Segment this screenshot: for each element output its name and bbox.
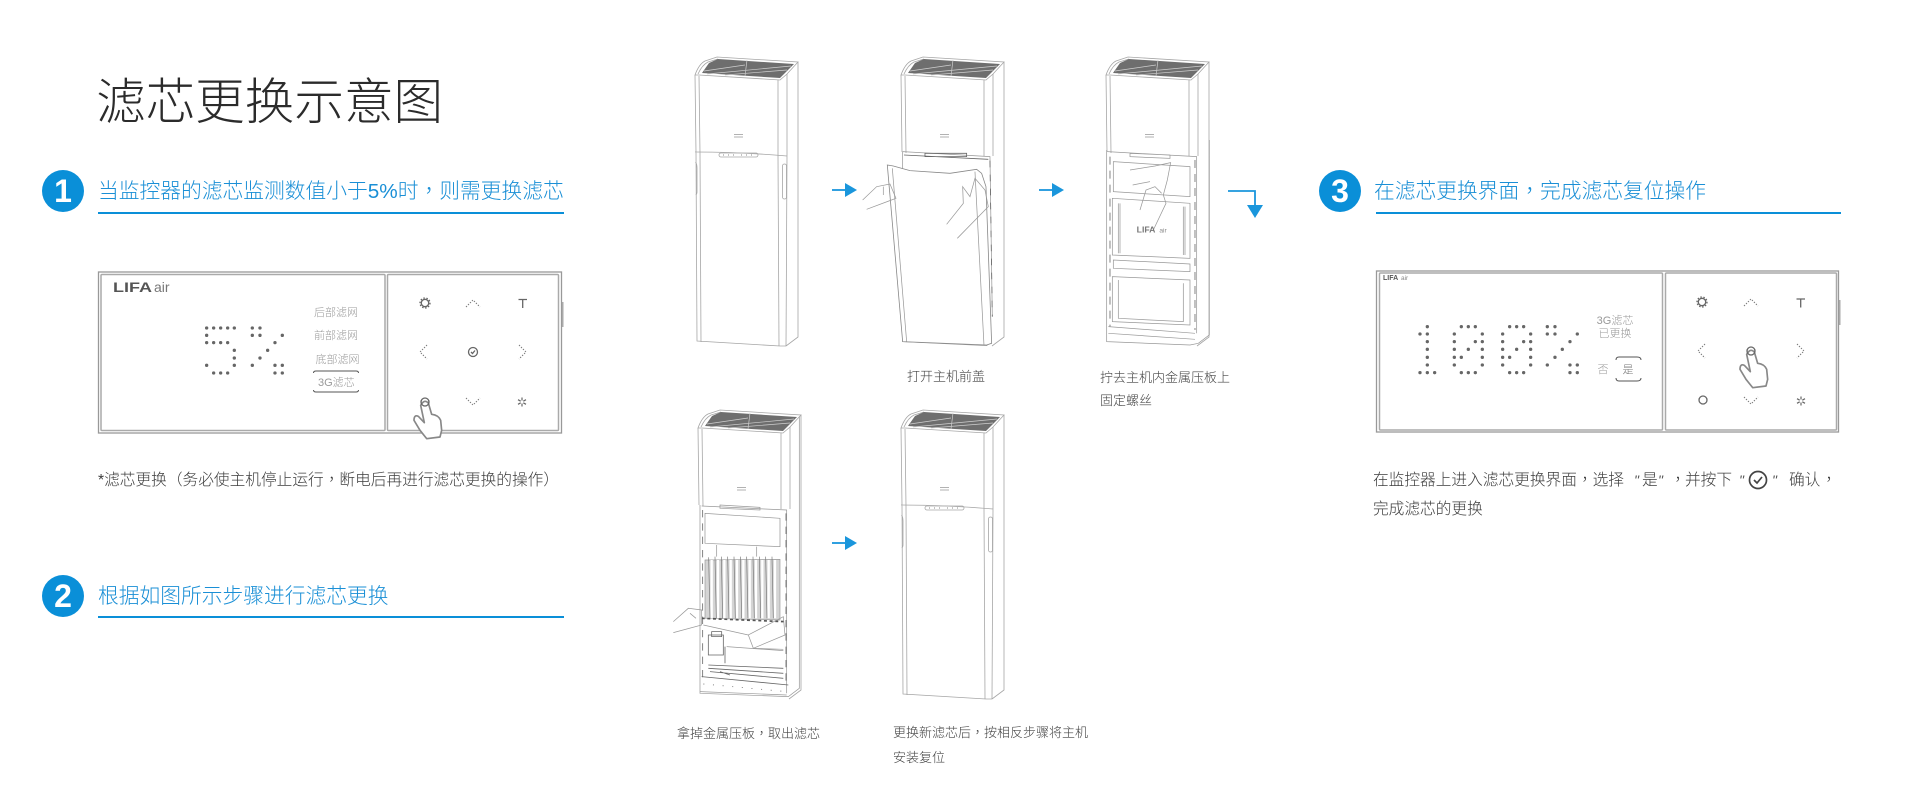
- brand logo small: [1383, 275, 1409, 282]
- control buttons: [420, 298, 527, 406]
- caption: reassemble: 安装复位: [893, 750, 945, 765]
- pleated filter: [705, 559, 780, 620]
- step 3 instructions: ，: [1670, 467, 1686, 490]
- control buttons: [1697, 297, 1805, 406]
- step 3 instructions: ": [1634, 472, 1640, 488]
- filter replaced prompt: 否: [1598, 364, 1608, 376]
- arrow 1: [832, 183, 857, 197]
- filter labels: 底部滤网: [316, 353, 360, 366]
- dot matrix: 100%: [1420, 327, 1577, 373]
- icon: pointing hand: [414, 398, 442, 439]
- filter labels: [314, 306, 360, 392]
- step 1 number badge: [42, 170, 84, 212]
- step 2 heading: [42, 575, 564, 618]
- step 2 number badge: [42, 575, 84, 617]
- step 3 instructions: ，: [1821, 467, 1837, 490]
- caption: take out filter: 拿掉金属压板，取出滤芯: [677, 723, 820, 742]
- caption: remove screws: [1100, 370, 1230, 408]
- step 3 number badge: [1319, 170, 1361, 212]
- step 3 heading: [1319, 170, 1841, 214]
- step 1 heading: [42, 170, 564, 214]
- filter replaced prompt: 3G滤芯: [1597, 314, 1633, 327]
- safety note: *滤芯更换（务必使主机停止运行，断电后再进行滤芯更换的操作）: [98, 467, 559, 490]
- unit: reassembled: [901, 410, 1004, 699]
- title: 滤芯更换示意图: [96, 74, 443, 130]
- step 3 instructions: 确认: [1789, 471, 1821, 489]
- brand logo small: LIFA: [1383, 275, 1398, 282]
- monitor panel: 5 percent: [98, 272, 564, 439]
- step 1 text: 当监控器的滤芯监测数值小于5%时，则需更换滤芯: [98, 174, 564, 204]
- unit: front cover opening: [863, 57, 1004, 346]
- filter labels: 3G滤芯: [318, 376, 355, 389]
- step 2 number badge: 2: [54, 578, 72, 614]
- filter labels: 前部滤网: [314, 328, 358, 342]
- unit: closed: [695, 57, 798, 346]
- caption: reassemble: 更换新滤芯后，按相反步骤将主机: [893, 722, 1088, 741]
- arrow 2: [1039, 183, 1064, 197]
- filter replaced prompt: 已更换: [1598, 326, 1632, 340]
- brand logo: air: [154, 279, 170, 295]
- step 1 number badge: 1: [54, 173, 72, 209]
- unit: metal plate screws: LIFA: [1137, 225, 1156, 235]
- filter replaced prompt: [1597, 314, 1641, 381]
- icon: pointing hand: [1740, 347, 1768, 388]
- step 3 instructions: ": [1658, 472, 1664, 488]
- hand: [1130, 163, 1171, 230]
- brand logo small: air: [1401, 275, 1409, 282]
- step 3 instructions: [1373, 467, 1837, 518]
- hands: [863, 178, 988, 238]
- step 2 text: 根据如图所示步骤进行滤芯更换: [98, 585, 389, 608]
- dot matrix: 5%: [207, 328, 282, 373]
- step 3 instructions: 在监控器上进入滤芯更换界面，选择: [1373, 467, 1624, 490]
- filter labels: 后部滤网: [314, 306, 358, 319]
- filter replaced prompt: 是: [1622, 363, 1634, 376]
- caption: reassemble: [893, 722, 1088, 765]
- arrow 3: [1228, 191, 1263, 218]
- caption: remove screws: 拧去主机内金属压板上: [1100, 370, 1230, 385]
- step 3 instructions: ": [1772, 472, 1778, 488]
- arrow 4: [832, 536, 857, 550]
- brand logo: LIFA: [113, 280, 152, 295]
- hands: [673, 608, 785, 648]
- icon: confirm check: [1750, 472, 1766, 488]
- step 3 text: 在滤芯更换界面，完成滤芯复位操作: [1374, 174, 1706, 204]
- step 3 number badge: 3: [1331, 173, 1349, 209]
- unit: filter removed: [673, 410, 801, 699]
- step 3 instructions: ": [1739, 472, 1745, 488]
- caption: remove screws: 固定螺丝: [1100, 393, 1152, 408]
- unit: metal plate screws: air: [1159, 228, 1168, 235]
- monitor panel: 100 percent: [1376, 271, 1840, 432]
- step 3 instructions: 完成滤芯的更换: [1373, 500, 1483, 518]
- unit: metal plate screws: [1106, 57, 1209, 346]
- step 3 instructions: 是: [1642, 472, 1658, 489]
- lower mechanism: [703, 625, 783, 651]
- caption: open cover: 打开主机前盖: [907, 369, 985, 384]
- brand logo: [113, 279, 170, 295]
- step 3 instructions: 并按下: [1685, 471, 1732, 489]
